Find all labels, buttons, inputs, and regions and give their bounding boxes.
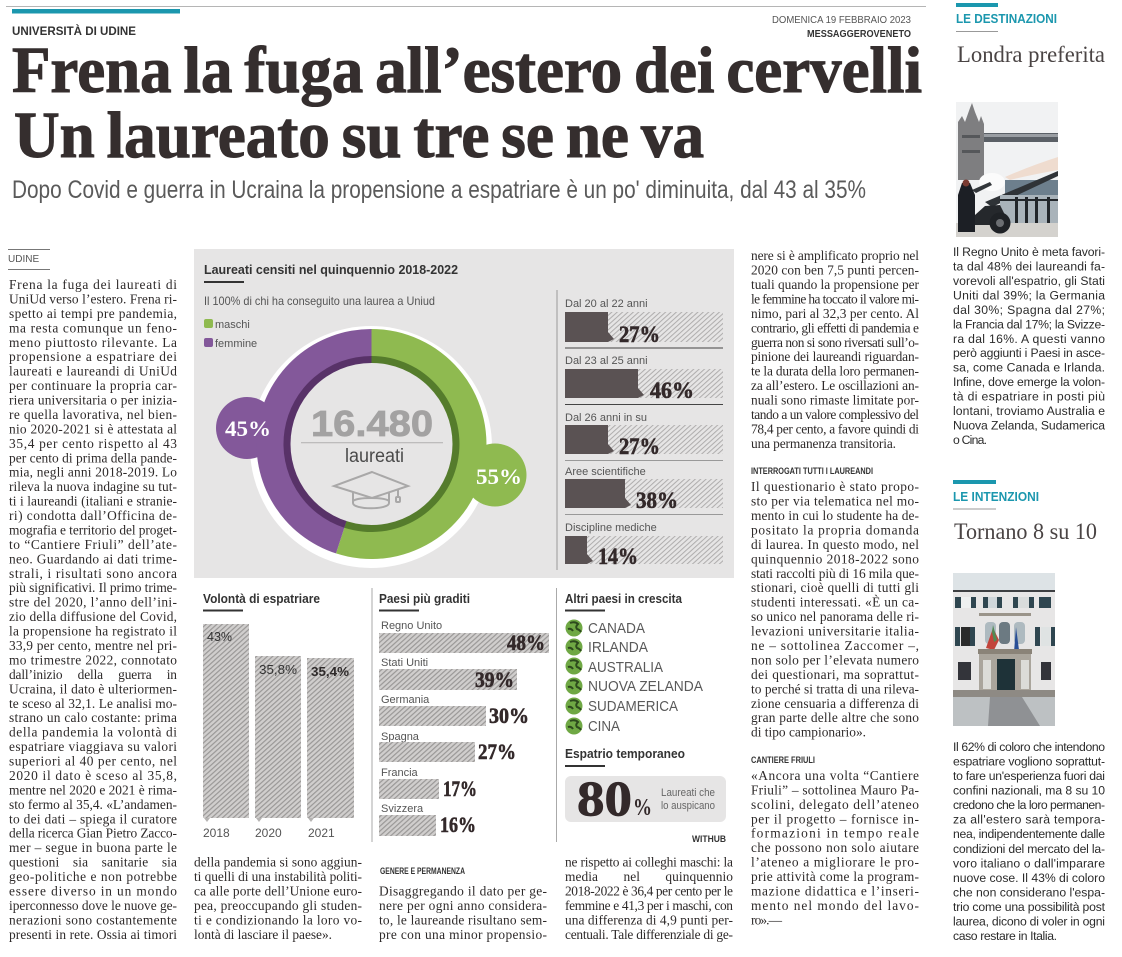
article column 1: essere diverso in un mondo: [9, 884, 177, 898]
article column 5 end: [751, 768, 919, 927]
article column 2: [194, 855, 362, 942]
sidebar text: Il Regno Unito è meta favori-: [953, 245, 1105, 259]
legend: maschi: [215, 319, 250, 331]
article column 5: una permanenza transitoria.: [751, 436, 896, 451]
article column 5 end: Friuli” – sottolinea Mauro Pa-: [751, 782, 919, 797]
article column 5 end: prie attività come la program-: [751, 869, 919, 884]
bar: dal 26 anni in su: 27%: [619, 434, 660, 459]
article column 5 end: l’ateneo a migliorare le pro-: [751, 855, 919, 870]
bar: Francia: 17%: [443, 776, 477, 801]
sidebar text: condizioni del mercato del la-: [953, 842, 1105, 856]
item: Canada: CANADA: [588, 620, 645, 637]
article column 1: superiori al 40 per cento, nel: [9, 754, 177, 768]
article column 5 middle: di laurea. In questo modo, nel: [751, 537, 919, 552]
sidebar text: lontani, troviamo Australia e: [953, 404, 1105, 418]
article column 3: [379, 884, 547, 942]
item: Sudamerica: SUDAMERICA: [588, 698, 678, 715]
article column 5 end: scolini, delegato dell’ateneo: [751, 797, 919, 812]
article column 1: nio 2020-2021 si è attestata al: [9, 421, 177, 436]
bar: dal 23 al 25 anni: [565, 355, 723, 403]
photo: palazzo of the university: [953, 573, 1055, 726]
dateline: UDINE: [8, 254, 39, 265]
sidebar text: ta dal 48% dei laureandi fa-: [953, 260, 1105, 274]
sidebar text: dal 30%; Spagna dal 27%;: [953, 303, 1105, 317]
headline: [12, 34, 922, 172]
article column 5 middle: mento in cui lo studente ha de-: [751, 508, 919, 523]
bar: Regno Unito: Regno Unito: [381, 620, 442, 632]
sidebar text: Il 62% di coloro che intendono: [953, 740, 1105, 754]
article column 5: guerra non si sono riversati sull’o-: [751, 335, 919, 350]
article column 4: centuali. Tale differenziale di ge-: [565, 927, 733, 942]
article column 5 end: formazioni in tempo reale: [751, 826, 919, 841]
article column 1: spetto ai tempi pre pandemia,: [9, 306, 177, 321]
article column 3: pre con una minor propensio-: [379, 927, 547, 942]
article column 3: nere per ogni anno considera-: [379, 898, 547, 913]
sidebar heading: Tornano 8 su 10: [954, 519, 1097, 544]
value: maschi: 55%: [476, 464, 522, 489]
article column 1: [9, 277, 177, 942]
bar: Stati Uniti: 39%: [475, 667, 514, 692]
sidebar label: LE DESTINAZIONI: [956, 11, 1057, 26]
sidebar text: Uniti dal 39%; la Germania: [953, 288, 1105, 302]
total label: laureati: [345, 446, 404, 467]
bar: Germania: 30%: [489, 703, 529, 728]
article column 1: presenti in rete. Ossia ai timori: [9, 927, 177, 942]
article column 1: Frena la fuga dei laureati di: [9, 277, 177, 292]
sidebar text: espatriare vogliono soprattut-: [953, 754, 1105, 768]
sidebar text: credono che la loro permanen-: [953, 798, 1105, 812]
article column 5 middle: dei questionari, ma soprattut-: [751, 667, 919, 682]
bar: dal 20 al 22 anni: [565, 298, 723, 347]
subheading: Dopo Covid e guerra in Ucraina la propensione a espatriare è un po' diminuita, dal 43 al 35%: [12, 176, 866, 204]
article column 2: ca alle porte dell’Unione euro-: [194, 884, 362, 898]
article column 5 middle: Il questionario è stato propo-: [751, 479, 919, 494]
article column 5 middle: studenti interessati. «È un ca-: [751, 595, 919, 610]
section accent bar: [12, 9, 180, 14]
bar: Spagna: 27%: [478, 739, 516, 764]
article column 2: ti e condizionando la loro vo-: [194, 912, 362, 927]
article column 5 middle: [751, 479, 919, 740]
sidebar text: Nuova Zelanda, Sudamerica: [953, 418, 1105, 432]
article column 1: laureati e laureandi di UniUd: [9, 364, 177, 379]
bar: Stati Uniti: Stati Uniti: [381, 657, 428, 669]
sidebar text: Infine, dove emerge la volon-: [953, 375, 1105, 389]
callout value: 80: [577, 770, 632, 826]
column 2018: [203, 624, 249, 840]
article column 1: geo-politiche e non potrebbe: [9, 869, 177, 884]
sidebar text: to fare un'esperienza fuori dai: [953, 769, 1105, 783]
article column 1: per cento di prima della pande-: [9, 450, 177, 465]
panel title: Laureati censiti nel quinquennio 2018-2022: [204, 262, 458, 277]
article column 1: zio della diffusione del Covid,: [9, 609, 177, 624]
sidebar text: trio come una possibilità post: [953, 900, 1106, 914]
legend: [204, 319, 257, 350]
article column 5: le femmine ha toccato il valore mi-: [751, 291, 919, 306]
article column 1: della ricerca Gian Pietro Zacco-: [9, 826, 177, 841]
article column 5: pinione dei laureandi riguardan-: [751, 349, 919, 364]
article column 4: 2018-2022 è 36,4 per cento per le: [565, 884, 733, 898]
chart: paesi più graditi: [379, 591, 549, 837]
bar: dal 20 al 22 anni: 27%: [619, 322, 660, 347]
bar: aree scientifiche: 38%: [636, 488, 678, 513]
list: altri paesi in crescita: [565, 591, 703, 735]
bar: Svizzera: [379, 803, 476, 837]
article column 1: Ucraina, il dato è ulteriormen-: [9, 681, 177, 696]
column 2020: [255, 656, 301, 840]
article column 5 end: che possono non solo aiutare: [751, 840, 919, 855]
article column 1: la propensione ha registrato il: [9, 624, 177, 639]
list title: Altri paesi in crescita: [565, 591, 683, 606]
article column 3: to, le laureande risultano sem-: [379, 912, 547, 927]
article column 5 end: mento nel mondo del lavo-: [751, 898, 919, 913]
sidebar heading: Londra preferita: [957, 42, 1105, 67]
article column 1: to “Cantiere Friuli” dell’ate-: [9, 537, 177, 552]
panel background: [194, 249, 734, 578]
bar: aree scientifiche: Aree scientifiche: [565, 466, 646, 478]
article column 1: iperconnesso dove le nuove ge-: [9, 898, 177, 913]
sidebar text: ra dal 16%. A questi vanno: [953, 332, 1105, 346]
sidebar text: però aggiunti i Paesi in asce-: [953, 346, 1105, 360]
value: femmine: 45%: [225, 416, 271, 441]
article column 2: pea, preoccupando gli studen-: [194, 898, 362, 913]
sidebar label: LE INTENZIONI: [953, 489, 1039, 504]
article column 1: UniUd verso l’estero. Frena ri-: [9, 291, 177, 306]
article column 1: 2020 il dato è sceso al 35,8,: [9, 768, 177, 783]
article column 5: nere si è amplificato proprio nel: [751, 248, 919, 263]
bar: Francia: [379, 767, 477, 801]
item: Nuova Zelanda: NUOVA ZELANDA: [588, 678, 703, 695]
section label: UNIVERSITÀ DI UDINE: [12, 23, 136, 38]
bar: Regno Unito: 48%: [507, 630, 545, 655]
callout: espatrio temporaneo: [565, 746, 726, 826]
article column 5: contrario, gli effetti di pandemia e: [751, 320, 919, 335]
subhead: cantiere friuli: CANTIERE FRIULI: [751, 755, 815, 765]
article column 5 middle: so unico nel panorama delle ri-: [751, 609, 919, 624]
sidebar text: la Francia dal 17%; la Svizze-: [953, 317, 1105, 331]
article column 1: per continuare la propria car-: [9, 378, 177, 393]
article column 5 middle: zione censuaria a differenza di: [751, 696, 919, 711]
article column 5: te la durata della loro permanen-: [751, 364, 919, 379]
article column 1: mia, negli anni 2018-2019. Lo: [9, 465, 177, 480]
subhead: genere e permanenza: GENERE E PERMANENZA: [380, 866, 465, 876]
article column 2: lontà di lasciare il paese».: [194, 927, 332, 942]
article column 5 end: per il progetto – fornisce in-: [751, 811, 919, 826]
column 2020: 35,8%: [259, 663, 297, 677]
article column 1: ma resta comunque un feno-: [9, 320, 177, 335]
sidebar: le destinazioni: [953, 3, 1105, 447]
article column 5 middle: di tipo campionario».: [751, 725, 866, 740]
article column 1: stre del 2020, l’anno dell’ini-: [9, 595, 177, 610]
sidebar text: za all'estero sarà tempora-: [953, 813, 1105, 827]
sidebar text: tà di espatriare in posti più: [953, 390, 1105, 404]
callout caption: Laureati che: [661, 787, 715, 799]
article column 5 middle: stionari, cioè quelli di tutti gli: [751, 580, 919, 595]
bar: dal 23 al 25 anni: 46%: [650, 378, 694, 403]
credit: WITHUB: [692, 834, 726, 844]
icon: graduation cap: [334, 472, 408, 508]
article column 1: mentre nel 2020 e 2021 è rima-: [9, 782, 177, 797]
bar: Svizzera: Svizzera: [381, 803, 424, 815]
dateline: [8, 249, 50, 270]
article column 3: Disaggregando il dato per ge-: [379, 884, 547, 898]
article column 1: mografia e territorio del proget-: [9, 522, 177, 538]
bar: Germania: Germania: [381, 694, 430, 706]
chart title: Volontà di espatriare: [203, 591, 320, 606]
sidebar text: sa, come Canada e Irlanda.: [953, 361, 1105, 375]
item: Australia: AUSTRALIA: [588, 659, 663, 676]
column 2018: 2018: [203, 826, 230, 840]
article column 1: rileva la nuova indagine su tut-: [9, 479, 177, 494]
article column 2: della pandemia si sono aggiun-: [194, 855, 362, 870]
total graduates: 16.480: [311, 403, 433, 444]
bar: dal 26 anni in su: Dal 26 anni in su: [565, 412, 647, 424]
bar: dal 26 anni in su: [565, 412, 723, 459]
callout: espatrio temporaneo: %: [633, 795, 652, 821]
article column 1: strano un calo costante: prima: [9, 710, 177, 725]
article column 1: questioni sia sanitarie sia: [9, 855, 177, 870]
article column 5: tuali quando la propensione per: [751, 277, 920, 292]
article column 1: 33,9 per cento, mentre nel pri-: [9, 638, 177, 653]
date: DOMENICA 19 FEBBRAIO 2023: [772, 15, 911, 26]
headline: Frena la fuga all’estero dei cervelli: [12, 34, 922, 107]
bar: discipline mediche: Discipline mediche: [565, 522, 657, 534]
bar: dal 20 al 22 anni: Dal 20 al 22 anni: [565, 298, 648, 310]
article column 4: femmine e 41,3 per i maschi, con: [565, 898, 733, 913]
item: Cina: CINA: [588, 718, 620, 735]
bar: aree scientifiche: [565, 466, 723, 513]
article column 5 end: ro».—: [751, 912, 783, 927]
article column 1: mer – segue in buona parte le: [9, 840, 177, 855]
subhead: interrogati tutti i laureandi: INTERROGATI TUTTI I LAUREANDI: [751, 466, 873, 476]
article column 1: to dei dati – spiega il curatore: [9, 811, 177, 826]
sidebar text: vorevoli all'espatrio, gli Stati: [953, 274, 1105, 288]
bar: Regno Unito: [379, 620, 549, 655]
photo: Tower Bridge and cannon: [956, 102, 1058, 237]
sidebar text: nuove cose. Il 43% di coloro: [953, 871, 1105, 885]
item: Irlanda: IRLANDA: [588, 639, 648, 656]
sidebar text: laurea, dicono di voler in ogni: [953, 914, 1105, 928]
article column 1: meno piuttosto rilevante. La: [9, 335, 177, 350]
column 2021: [307, 658, 354, 840]
article column 1: ri) condotta dall’Officina de-: [9, 508, 177, 523]
item: Cina: [566, 718, 620, 735]
column 2020: 2020: [255, 826, 282, 840]
article column 5: nuali sono rimaste limitate por-: [751, 392, 919, 408]
article column 5: nimo, pari al 32,3 per cento. Al: [751, 306, 919, 321]
article column 1: re quella lavorativa, nel bien-: [9, 407, 177, 422]
column 2018: 43%: [207, 630, 232, 644]
callout: espatrio temporaneo: lo auspicano: [661, 800, 715, 812]
article column 5: [751, 248, 920, 451]
article column 1: 35,4 per cento rispetto al 43: [9, 436, 177, 451]
sidebar text: nea, indipendentemente dalle: [953, 827, 1105, 841]
article column 4: [565, 855, 733, 942]
column 2021: 35,4%: [311, 665, 349, 679]
article column 2: ti quelli di una instabilità politi-: [194, 869, 362, 884]
sidebar text: voro italiano o dall'imparare: [953, 856, 1105, 870]
bar: discipline mediche: 14%: [598, 544, 638, 569]
bar: Stati Uniti: [379, 657, 517, 692]
bar: Germania: [379, 694, 529, 728]
bar: Svizzera: 16%: [440, 812, 476, 837]
article column 5 middle: stati raccolti più di 16 mila que-: [751, 566, 919, 581]
article column 5 middle: to perché si tratta di una rileva-: [751, 681, 919, 696]
sidebar text: caso restare in Italia.: [953, 929, 1057, 943]
column 2021: 2021: [308, 826, 335, 840]
article column 5 end: «Ancora una volta “Cantiere: [751, 768, 919, 783]
article column 4: una differenza di 4,9 punti per-: [565, 912, 733, 927]
callout title: Espatrio temporaneo: [565, 746, 685, 761]
bar: discipline mediche: [565, 522, 723, 569]
bar: Francia: Francia: [381, 767, 419, 779]
article column 5: tando a un valore complessivo del: [751, 407, 919, 422]
article column 1: strali, i risultati sono ancora: [9, 566, 177, 581]
chart: volontà di espatriare: [203, 591, 354, 840]
chart title: Paesi più graditi: [379, 591, 470, 606]
article column 5 middle: levazioni universitarie italia-: [751, 624, 919, 639]
article column 1: nerazioni sono costantemente: [9, 912, 177, 927]
headline: Un laureato su tre se ne va: [14, 99, 704, 172]
item: Canada: [566, 620, 645, 637]
article column 1: della pandemia la volontà di: [9, 725, 177, 740]
sidebar text: o Cina.: [953, 433, 987, 447]
item: Australia: [566, 658, 663, 676]
top rule: [6, 6, 926, 7]
article column 5 middle: quinquennio 2018-2022 sono: [751, 551, 919, 566]
article column 4: ne rispetto ai colleghi maschi: la: [565, 855, 733, 870]
article column 5: 78,4 per cento, a favore quindi di: [751, 421, 919, 436]
sidebar: le intenzioni: [953, 480, 1106, 943]
panel subtitle: Il 100% di chi ha conseguito una laurea a Uniud: [204, 294, 435, 308]
article column 1: dall’inizio della guerra in: [9, 667, 177, 682]
article column 5: 2020 con ben 7,5 punti percen-: [751, 263, 919, 278]
article column 1: neo. Guardando ai dati trime-: [9, 551, 177, 566]
bar: Spagna: Spagna: [381, 731, 420, 743]
sidebar text: [953, 245, 1105, 447]
article column 1: propensione a espatriare dei: [9, 349, 177, 364]
callout box: [565, 776, 726, 822]
article column 1: sto fermo al 35,4. «L’andamen-: [9, 797, 177, 812]
bar: dal 23 al 25 anni: Dal 23 al 25 anni: [565, 355, 648, 367]
article column 5 middle: non solo per l’elevata numero: [751, 652, 919, 667]
article column 5 middle: gran parte delle altre che sono: [751, 710, 919, 725]
item: Irlanda: [566, 638, 648, 656]
legend: femmine: [215, 338, 257, 350]
article column 5: za all’estero. Le oscillazioni an-: [751, 378, 919, 393]
article column 5 middle: sto per via telematica nel mo-: [751, 494, 919, 509]
article column 1: ti i laureandi (italiani e stranie-: [9, 494, 177, 509]
article column 1: riera universitaria o per inizia-: [9, 392, 177, 408]
sidebar text: che non considerano l'espa-: [953, 885, 1105, 899]
article column 1: espatriare viaggiava su valori: [9, 739, 177, 754]
article column 5 middle: ne – sottolinea Zaccomer –,: [751, 638, 919, 653]
panel: laureati censiti: [194, 249, 734, 578]
article column 4: media nel quinquennio: [565, 869, 733, 884]
bar: Spagna: [379, 731, 516, 764]
newspaper name: MESSAGGEROVENETO: [807, 29, 911, 40]
sidebar text: [953, 740, 1106, 943]
article column 1: te sceso al 32,1. Le analisi mo-: [9, 696, 177, 711]
sidebar text: confini nazionali, ma 8 su 10: [953, 784, 1105, 798]
article column 5 end: mazione didattica e l’inseri-: [751, 884, 919, 898]
donut chart: [216, 326, 526, 568]
article column 1: mo trimestre 2022, connotato: [9, 652, 177, 667]
article column 5 middle: positato la propria domanda: [751, 522, 919, 538]
article column 1: più significativi. Il primo trime-: [9, 580, 177, 595]
